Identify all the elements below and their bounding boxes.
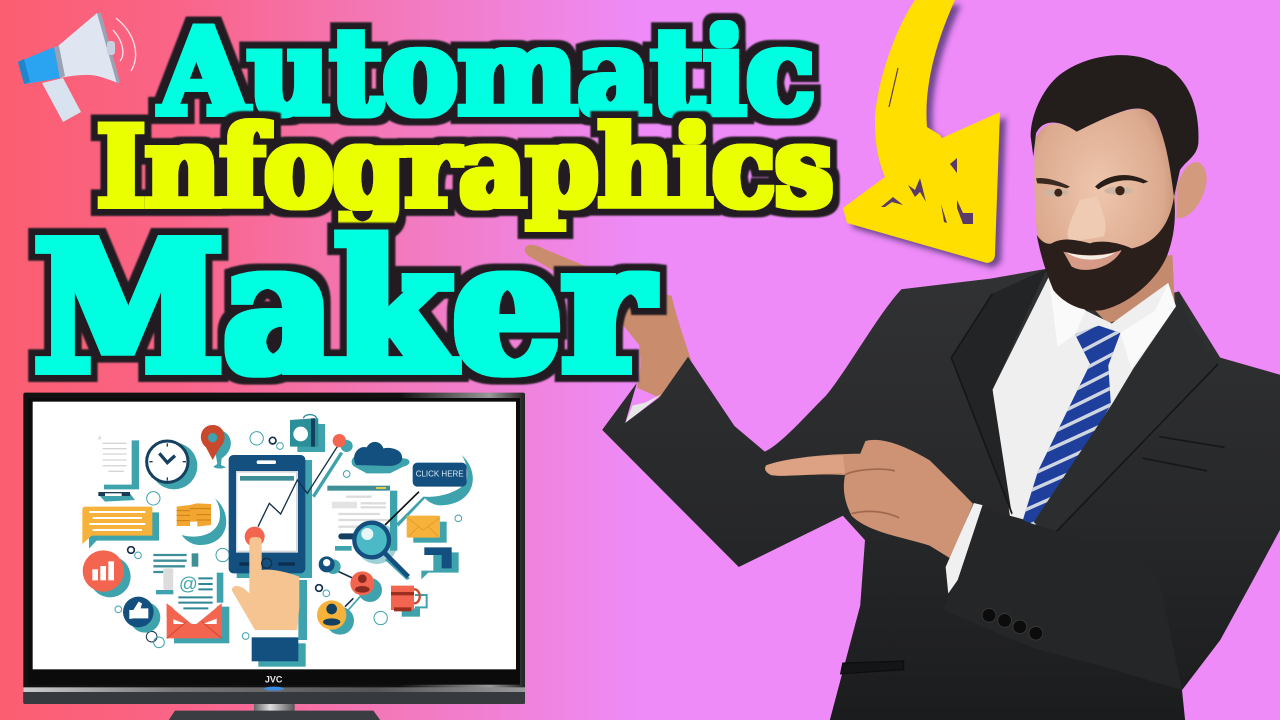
illustration: envelope — [407, 516, 447, 543]
illustration: browser window — [327, 486, 397, 551]
pointing right hand — [765, 440, 973, 558]
pocket — [841, 661, 904, 674]
right shirt cuff — [946, 503, 983, 594]
monitor frame — [23, 393, 525, 704]
monitor — [23, 393, 525, 720]
illustration: small rings — [115, 432, 462, 648]
illustration: mail envelope: @ — [179, 573, 198, 594]
illustration: click here button — [397, 455, 473, 527]
yellow curved arrow — [843, 0, 1006, 268]
illustration: text lines — [153, 553, 198, 594]
illustration: people network — [317, 556, 382, 635]
lapels — [951, 269, 1047, 516]
businessman photo — [525, 245, 1280, 720]
illustration: coral chart circle — [83, 550, 131, 597]
illustration: thumbs up — [123, 597, 160, 633]
hair — [1031, 55, 1198, 197]
illustration: location pin — [201, 425, 231, 469]
man's head — [1031, 55, 1207, 311]
illustration: magnifier — [354, 492, 419, 580]
illustration: cloud — [352, 442, 410, 473]
ear — [1177, 162, 1207, 218]
white shirt cuff on raised arm — [625, 394, 662, 424]
right sleeve — [943, 506, 1182, 690]
icon: megaphone — [18, 13, 136, 122]
illustration: orange chat bubble — [82, 507, 159, 549]
illustration: coffee mug — [391, 586, 427, 617]
sleeve buttons — [982, 608, 1043, 640]
eyebrows and eyes — [1036, 175, 1148, 197]
mouth — [1063, 250, 1122, 270]
monitor stand — [168, 704, 381, 720]
screen — [33, 402, 516, 669]
neck — [1051, 255, 1175, 323]
white shirt — [992, 276, 1176, 522]
title: Automatic: Automatic — [159, 2, 815, 143]
striped tie — [1023, 326, 1120, 526]
title: Infographics: Infographics — [97, 103, 833, 233]
illustration: mail envelope — [167, 573, 229, 643]
brand label: JVC — [265, 675, 283, 685]
illustration: speech bubbles — [421, 547, 459, 579]
illustration: document and pen — [97, 435, 139, 502]
illustration: click here button: CLICK HERE — [416, 470, 464, 479]
illustration: phone with chart — [229, 434, 353, 578]
monitor lower bezel — [23, 687, 525, 692]
nose — [1068, 197, 1106, 242]
illustration: coins and crescent — [177, 498, 226, 545]
beard — [1037, 197, 1175, 311]
illustration: shopping bag — [290, 415, 325, 452]
suit jacket — [602, 269, 1280, 720]
illustration: clock — [147, 441, 197, 489]
title: Maker: Maker — [34, 201, 654, 414]
raised left hand — [525, 245, 691, 398]
face — [1034, 109, 1177, 310]
illustration: pointing hand — [232, 527, 307, 667]
